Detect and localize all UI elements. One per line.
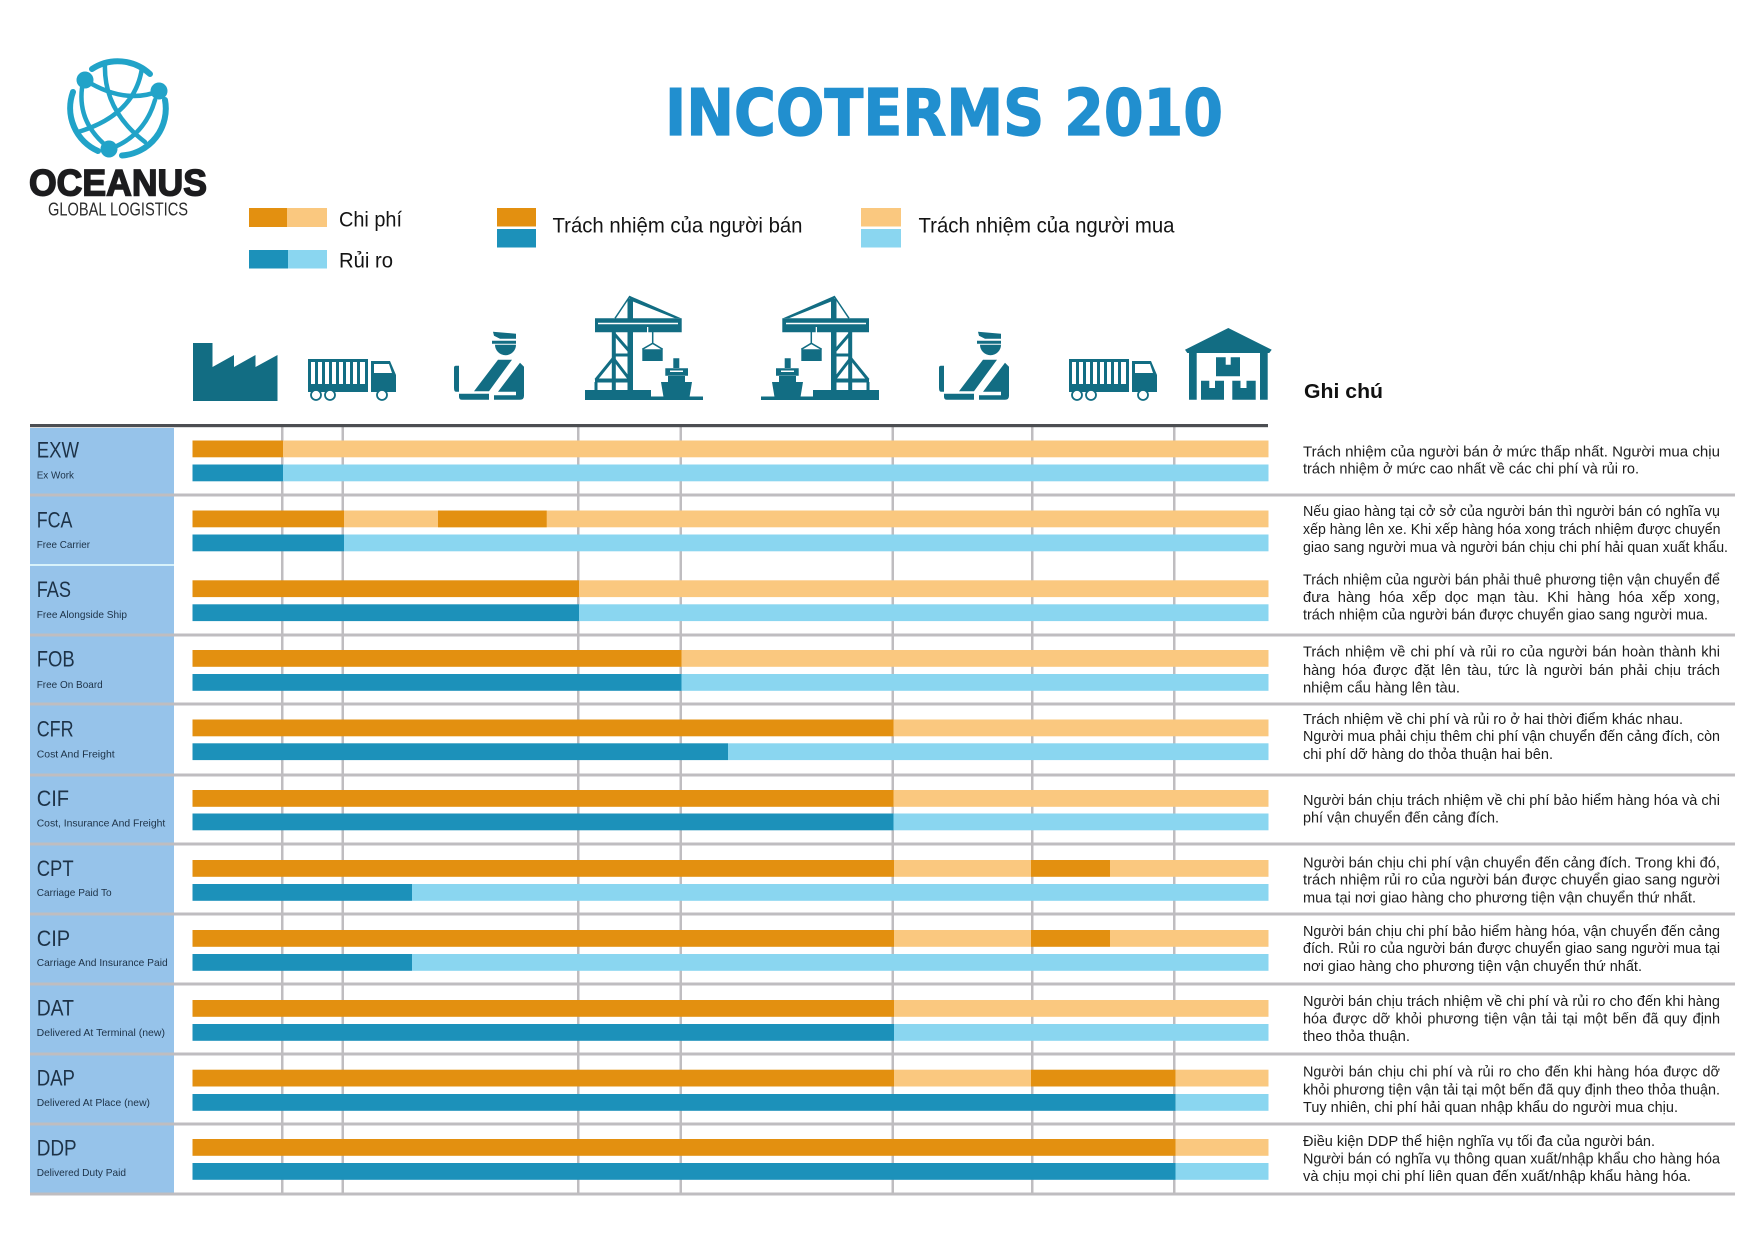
note: FCA: giao sang người mua và người bán chịu chi phí hải quan xuất khẩu. [1303,539,1728,556]
note: DDP: Người bán có nghĩa vụ thông quan xuất/nhập khẩu cho hàng hóa [1303,1150,1721,1168]
cost bar: CIP [192,930,1268,947]
row: EXW [37,438,1720,482]
term label: DAP [37,1066,150,1109]
term label: DAT [37,996,165,1039]
note: CIP: Người bán chịu chi phí bảo hiểm hàng hóa, vận chuyển đến cảng [1303,923,1720,940]
cost bar: FOB [192,650,1268,667]
note: CFR: Người mua phải chịu thêm chi phí vận chuyển đến cảng đích, còn [1303,728,1720,745]
chart grid [281,426,1176,1195]
legend: cost swatch [249,208,327,227]
legend: risk swatch [249,250,327,268]
term label: DDP [37,1135,126,1179]
note: EXW: trách nhiệm ở mức cao nhất về các chi phí và rủi ro. [1303,460,1639,478]
term label: DDP: Delivered Duty Paid [37,1167,126,1179]
note: CPT [1303,854,1720,906]
term label: DDP: DDP [37,1135,77,1160]
risk bar: DDP [192,1163,1268,1180]
risk bar: DAP [192,1094,1268,1111]
term label: EXW: Ex Work [37,470,75,482]
note: FOB: Trách nhiệm về chi phí và rủi ro của người bán hoàn thành khi [1303,644,1720,661]
row: CIP [37,923,1720,975]
title: INCOTERMS 2010 [665,77,1223,151]
term label: DAP: DAP [37,1066,75,1090]
legend: seller label: Trách nhiệm của người bán [552,214,802,238]
legend: risk label: Rủi ro [339,250,393,272]
cost bar: DDP [192,1139,1268,1156]
logo tagline: GLOBAL LOGISTICS [48,200,188,220]
row: FAS [37,572,1720,624]
note: CIF: phí vận chuyển đến cảng đích. [1303,810,1499,826]
term label: DAT: Delivered At Terminal (new) [37,1027,165,1039]
row: CIF [37,786,1720,830]
note: FOB [1303,644,1720,696]
note: DAP: Người bán chịu chi phí và rủi ro cho đến khi hàng hóa được dỡ [1303,1064,1720,1081]
note: DAT [1303,993,1720,1045]
cost bar: CFR [192,720,1268,736]
row: CFR [37,711,1720,763]
note: CFR: Trách nhiệm về chi phí và rủi ro ở hai thời điểm khác nhau. [1303,711,1683,728]
icon: customs officer left [454,332,524,400]
icon: port crane right [761,296,879,400]
note: FCA: xếp hàng lên xe. Khi xếp hàng hóa xong trách nhiệm được chuyển [1303,521,1720,538]
term label: CFR: Cost And Freight [37,748,115,760]
note: CFR [1303,711,1720,763]
note: DAP: Tuy nhiên, chi phí hải quan nhập khẩu do người mua chịu. [1303,1099,1678,1116]
term label: CIP [37,926,168,969]
term label: DAT: DAT [37,996,74,1020]
term label: CIF: CIF [37,786,69,811]
risk bar: CPT [192,884,1268,901]
term label: FOB: FOB [37,647,75,672]
term label: CFR [37,716,115,760]
risk bar: EXW [192,464,1268,481]
note: CPT: trách nhiệm rủi ro của người bán được chuyển giao sang người [1303,872,1720,888]
note: CPT: Người bán chịu chi phí vận chuyển đến cảng đích. Trong khi đó, [1303,854,1720,872]
legend [249,208,1175,272]
term label: CPT [37,856,112,899]
note: CFR: chi phí dỡ hàng do thỏa thuận hai bên. [1303,746,1553,763]
note: DDP: Điều kiện DDP thể hiện nghĩa vụ tối đa của người bán. [1303,1133,1655,1150]
term label: FCA: Free Carrier [37,539,90,551]
note: EXW [1303,444,1720,478]
row: DAP [37,1064,1720,1116]
note: CIP [1303,923,1720,975]
icon: customs officer right [939,332,1009,400]
note: CIF: Người bán chịu trách nhiệm về chi phí bảo hiểm hàng hóa và chi [1303,792,1720,809]
note: DDP [1303,1133,1721,1185]
note: CIF [1303,792,1720,826]
note: FCA [1303,503,1728,556]
note: FOB: nhiệm cẩu hàng lên tàu. [1303,680,1460,696]
term label: FOB [37,647,103,691]
icon: truck left [308,359,396,400]
term label: CIP: Carriage And Insurance Paid [37,957,168,969]
term label: CPT: CPT [37,856,74,881]
term label: FAS: FAS [37,577,71,602]
note: CIP: nơi giao hàng cho phương tiện vận chuyển thứ nhất. [1303,958,1642,975]
icon: port crane left [585,296,703,400]
icon: warehouse [1185,328,1272,400]
note: FCA: Nếu giao hàng tại cở sở của người bán thì người bán có nghĩa vụ [1303,503,1720,520]
logo: Oceanus Global Logistics [29,61,207,219]
term label: CIF [37,786,165,830]
label column background [30,428,174,1195]
cost bar: CPT [192,860,1268,877]
table rules [30,424,1735,1196]
icon: globe network [70,61,168,157]
term label: CFR: CFR [37,716,74,742]
term label: FAS: Free Alongside Ship [37,609,127,621]
note: CIP: đích. Rủi ro của người bán được chuyển giao sang người mua tại [1303,940,1720,957]
risk bar: DAT [192,1024,1268,1041]
cost bar: EXW [192,440,1268,457]
legend: buyer label: Trách nhiệm của người mua [918,214,1175,238]
note: DAP [1303,1064,1720,1116]
note: CPT: mua tại nơi giao hàng cho phương tiện vận chuyển thứ nhất. [1303,890,1696,906]
row: DDP [37,1133,1721,1185]
cost bar: CIF [192,790,1268,807]
term label: CPT: Carriage Paid To [37,887,112,899]
legend: cost label: Chi phí [339,208,402,232]
row: FCA [37,503,1728,556]
icon: factory [193,343,278,401]
note: FAS: đưa hàng hóa xếp dọc mạn tàu. Khi hàng hóa xếp xong, [1303,589,1720,606]
note: FAS: Trách nhiệm của người bán phải thuê phương tiện vận chuyển để [1303,572,1720,588]
row: DAT [37,993,1720,1045]
note: DAT: Người bán chịu trách nhiệm về chi phí và rủi ro cho đến khi hàng [1303,993,1720,1010]
term label: EXW: EXW [37,438,79,462]
risk bar: CIF [192,814,1268,830]
cost bar: FAS [192,580,1268,597]
cost bar: FCA [192,510,1268,527]
note: FAS: trách nhiệm của người bán được chuyển giao sang người mua. [1303,606,1708,624]
row: CPT [37,854,1720,906]
term label: DAP: Delivered At Place (new) [37,1097,150,1109]
note: DAT: theo thỏa thuận. [1303,1028,1410,1045]
risk bar: CFR [192,743,1268,760]
note: DAT: hóa được dỡ khỏi phương tiện vận tải tại một bến đã quy định [1303,1010,1720,1028]
row: FOB [37,644,1720,696]
term label: CIF: Cost, Insurance And Freight [37,818,165,830]
note: DAP: khỏi phương tiện vận tải tại một bến đã quy định theo thỏa thuận. [1303,1082,1720,1098]
risk bar: CIP [192,954,1268,971]
risk bar: FCA [192,534,1268,551]
term label: EXW [37,438,79,482]
risk bar: FAS [192,604,1268,621]
legend: seller swatch [497,208,536,248]
legend: buyer swatch [861,208,901,248]
term label: FAS [37,577,127,621]
heading: notes column: Ghi chú [1304,381,1383,403]
note: FAS [1303,572,1720,624]
cost bar: DAP [192,1070,1268,1086]
icon: truck right [1069,359,1157,400]
note: DDP: và chịu mọi chi phí liên quan đến xuất/nhập khẩu hàng hóa. [1303,1168,1691,1185]
term label: FCA: FCA [37,508,73,532]
cost bar: DAT [192,1000,1268,1017]
term label: CIP: CIP [37,926,70,951]
logo wordmark: OCEANUS [29,162,207,204]
note: EXW: Trách nhiệm của người bán ở mức thấp nhất. Người mua chịu [1303,444,1720,460]
risk bar: FOB [192,674,1268,691]
term label: FCA [37,508,90,551]
term label: FOB: Free On Board [37,679,103,691]
note: FOB: hàng hóa được đặt lên tàu, tức là người bán phải chịu trách [1303,662,1720,679]
